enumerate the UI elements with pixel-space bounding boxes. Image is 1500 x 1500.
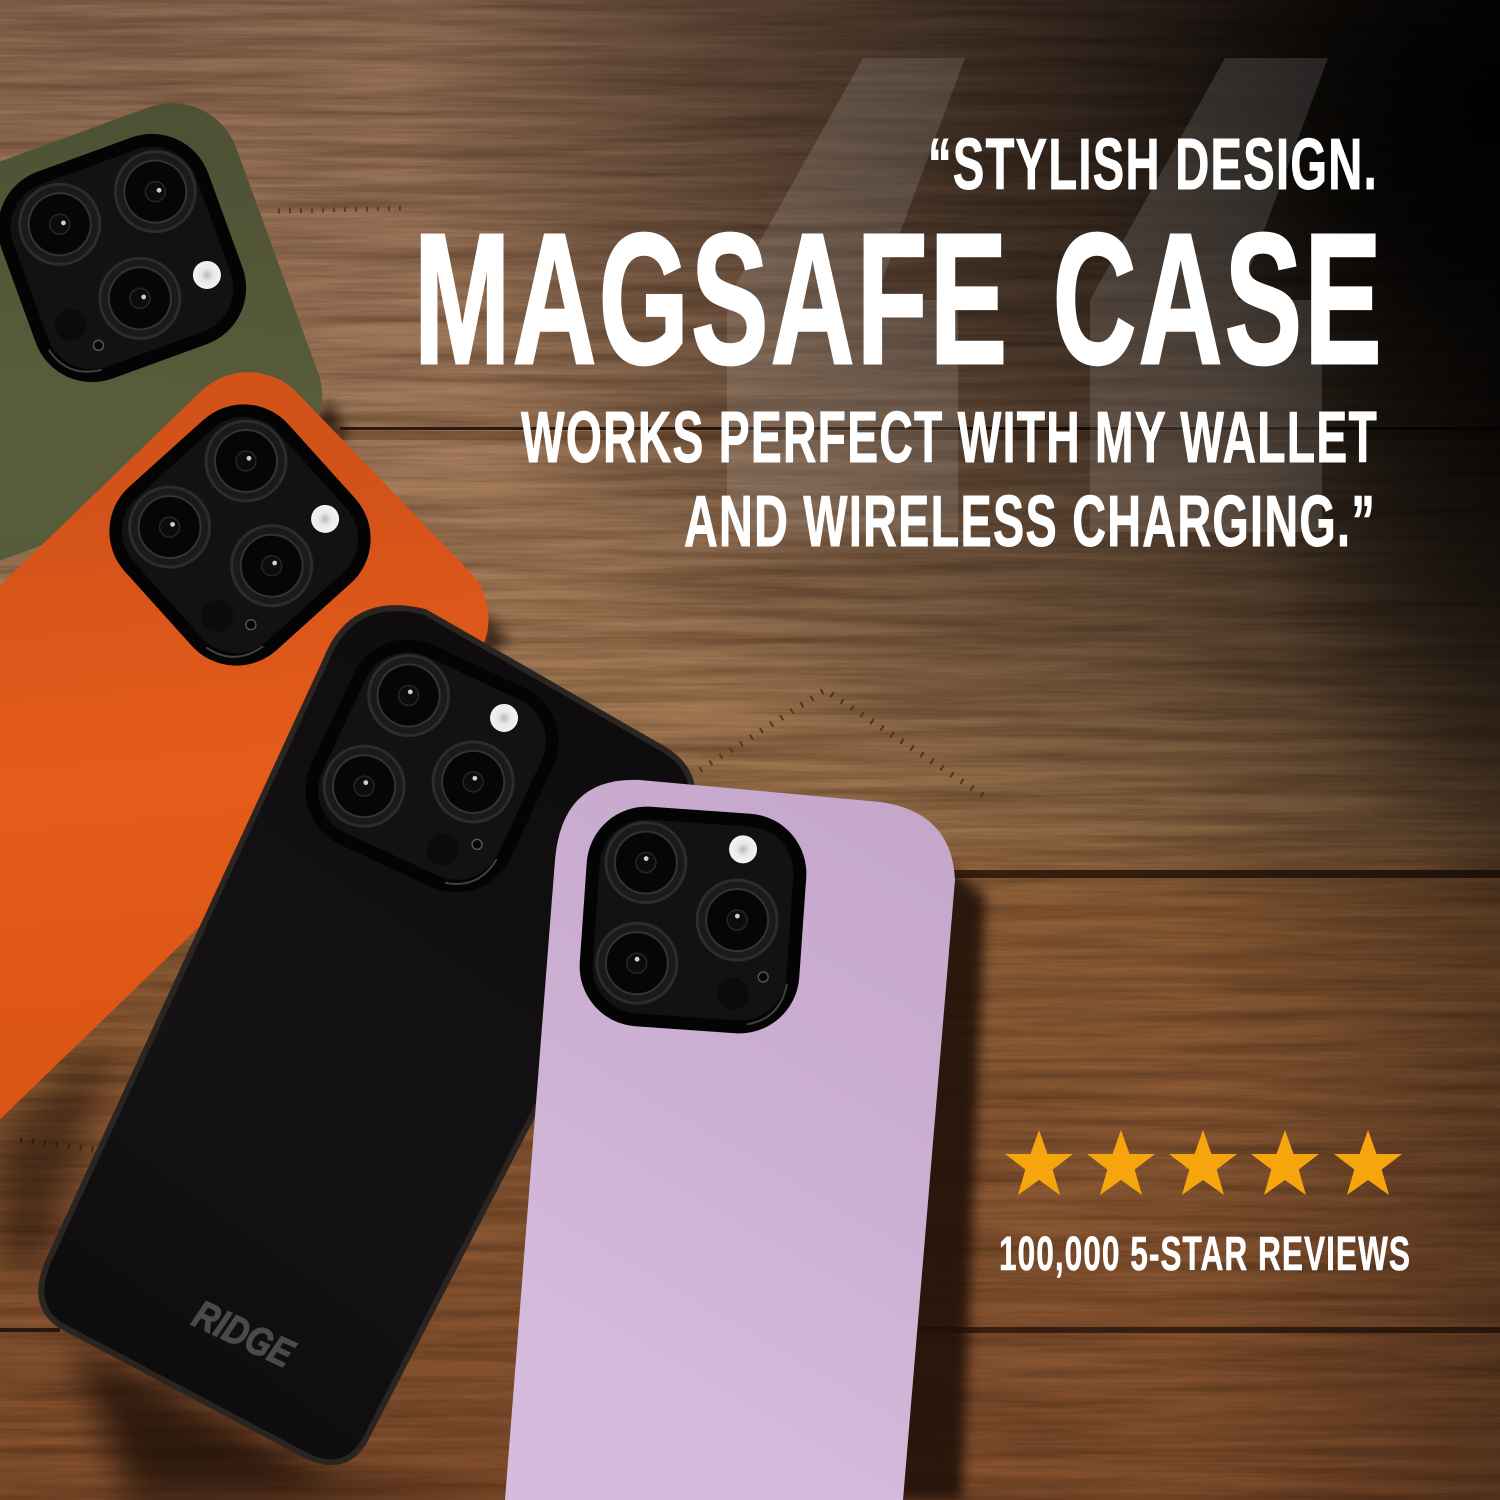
- lilac camera module: [576, 803, 810, 1037]
- review quote text: [414, 125, 1384, 562]
- phone: olive green case: [0, 84, 341, 710]
- decorative large quotation mark: [727, 58, 1328, 532]
- phone: orange case: [0, 344, 517, 1176]
- five star rating: [1005, 1130, 1402, 1195]
- black case body: [41, 608, 692, 1462]
- olive case body: [0, 84, 341, 710]
- lilac case body: [505, 780, 955, 1500]
- orange case body: [0, 344, 517, 1176]
- phone: black case: [41, 608, 692, 1462]
- olive camera module: [0, 117, 263, 399]
- RIDGE logo: RIDGE: [186, 1292, 301, 1377]
- black camera module: [286, 620, 578, 912]
- orange camera module: [85, 380, 395, 690]
- phone shadows: [0, 400, 985, 1500]
- phone: lilac case: [505, 780, 955, 1500]
